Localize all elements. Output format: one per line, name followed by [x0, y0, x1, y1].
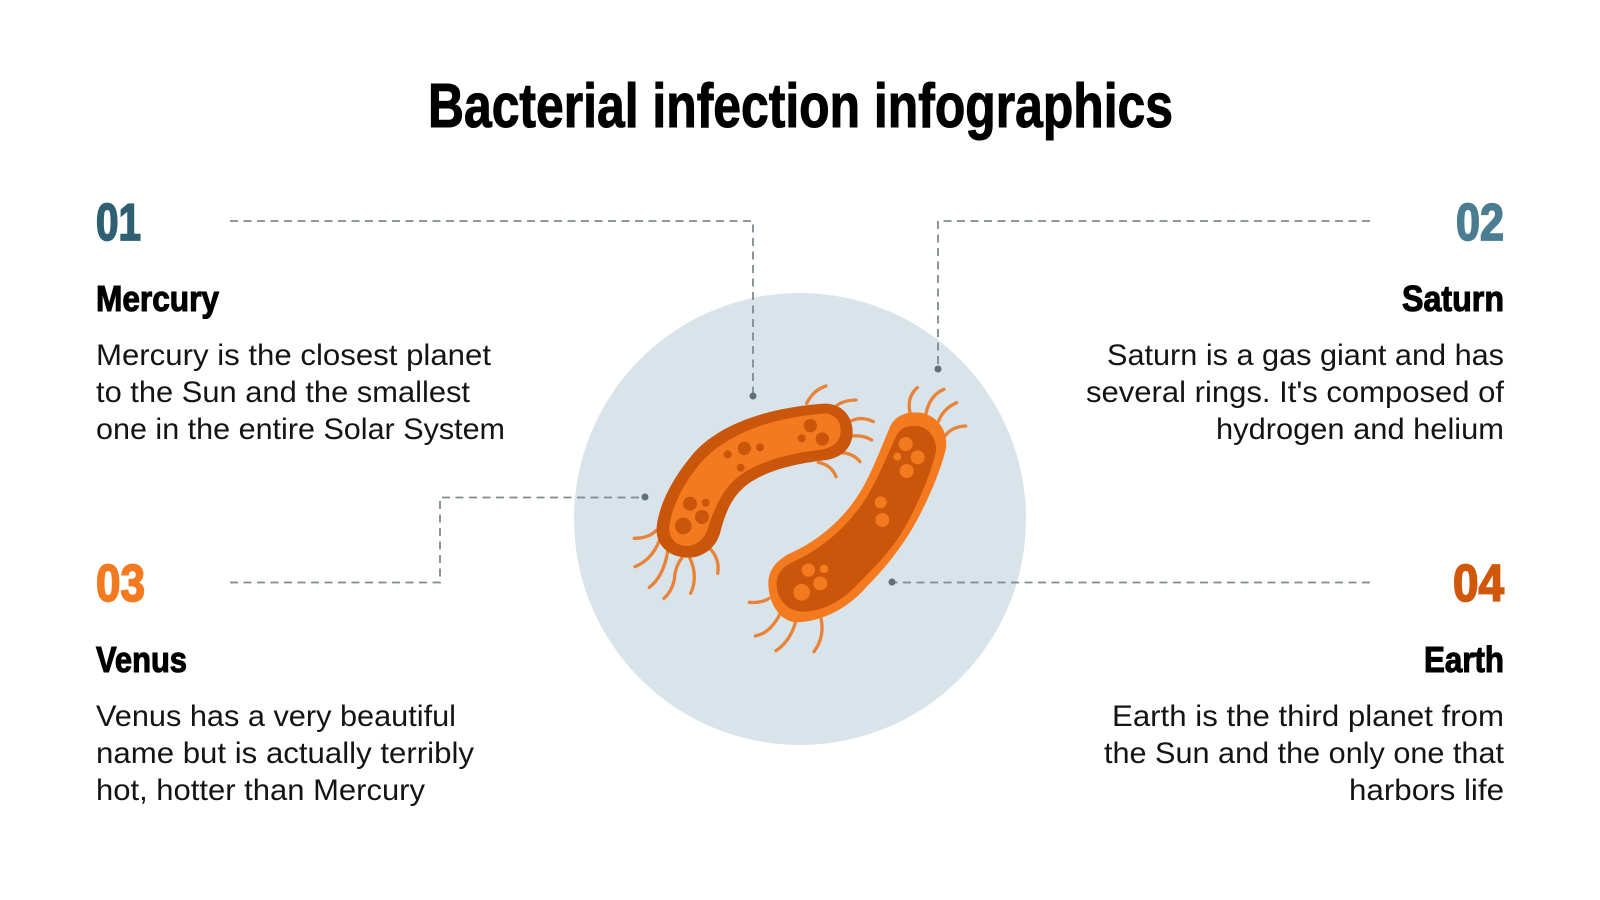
description: Saturn: several rings. It's composed of: [1086, 376, 1505, 409]
description: Earth: [1104, 700, 1504, 807]
number 01: 01: [96, 194, 141, 252]
connector: 02: [934, 221, 1370, 372]
heading: Mercury: Mercury: [96, 278, 219, 319]
connector: 01: [230, 221, 756, 400]
description: Saturn: [1086, 339, 1505, 446]
description: Mercury: Mercury is the closest planet: [96, 339, 491, 372]
description: Mercury: to the Sun and the smallest: [96, 376, 470, 409]
panel: 01 Mercury: [96, 194, 505, 446]
background circle: [574, 293, 1026, 745]
description: Saturn: hydrogen and helium: [1216, 413, 1504, 446]
panel: 03 Venus: [96, 555, 474, 807]
description: Saturn: Saturn is a gas giant and has: [1107, 339, 1504, 372]
connector: 04: [888, 578, 1370, 586]
number 02: 02: [1456, 194, 1504, 252]
description: Earth: the Sun and the only one that: [1104, 737, 1504, 770]
description: Venus: [96, 700, 474, 807]
description: Venus: Venus has a very beautiful: [96, 700, 456, 733]
panel: 02 Saturn: [1086, 194, 1505, 446]
description: Earth: harbors life: [1349, 774, 1504, 807]
panel: 04 Earth: [1104, 555, 1504, 807]
icon: curved dark bacterium: [634, 386, 873, 598]
number 03: 03: [96, 555, 145, 613]
description: Mercury: one in the entire Solar System: [96, 413, 505, 446]
description: Earth: Earth is the third planet from: [1112, 700, 1504, 733]
connector: 03: [230, 494, 648, 582]
description: Venus: name but is actually terribly: [96, 737, 474, 770]
icon: elongated orange bacterium: [749, 388, 966, 652]
number 04: 04: [1453, 555, 1504, 613]
description: Venus: hot, hotter than Mercury: [96, 774, 425, 807]
heading: Earth: Earth: [1424, 639, 1504, 680]
heading: Venus: Venus: [96, 639, 187, 680]
heading: Saturn: Saturn: [1402, 278, 1504, 319]
description: Mercury: [96, 339, 505, 446]
title: Bacterial infection infographics: [428, 72, 1173, 141]
